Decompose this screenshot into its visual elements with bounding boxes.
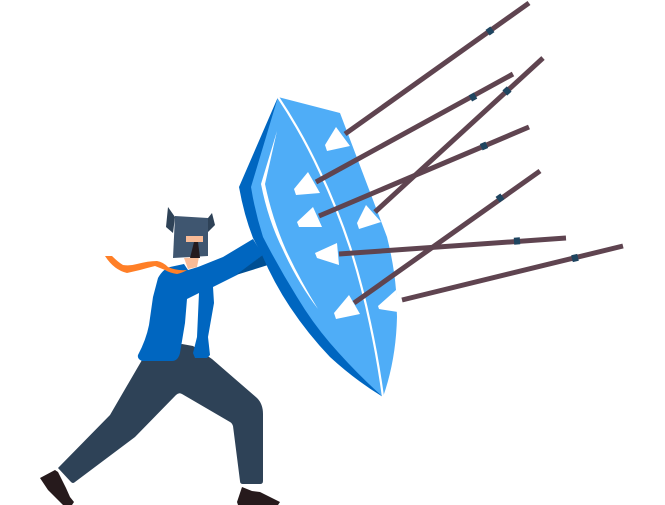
figure: businessman (40, 207, 280, 505)
shirt and arm (138, 239, 263, 361)
shield centre line (278, 97, 383, 397)
shield dark edge (239, 97, 383, 397)
helmet horns (166, 207, 215, 233)
spear 6 (354, 171, 540, 303)
spear 1 (345, 3, 529, 134)
spears (316, 3, 623, 303)
helmet visor (186, 236, 203, 242)
right shoe (237, 487, 280, 505)
trousers (58, 344, 263, 484)
shield (239, 97, 398, 397)
spear 2 (316, 74, 513, 182)
spear 5 (339, 238, 566, 254)
shield inner highlight (261, 131, 318, 309)
necktie (105, 256, 187, 274)
spear bands (470, 29, 578, 259)
arm shadow (236, 254, 268, 275)
shield face (251, 97, 397, 397)
helmet nose slit (190, 242, 200, 258)
spear 3 (319, 127, 529, 216)
left shoe (40, 470, 74, 505)
arrowheads (294, 127, 398, 319)
neck (184, 257, 199, 269)
spear 7 (402, 246, 623, 300)
helmet (173, 216, 208, 258)
spear 4 (375, 58, 543, 212)
